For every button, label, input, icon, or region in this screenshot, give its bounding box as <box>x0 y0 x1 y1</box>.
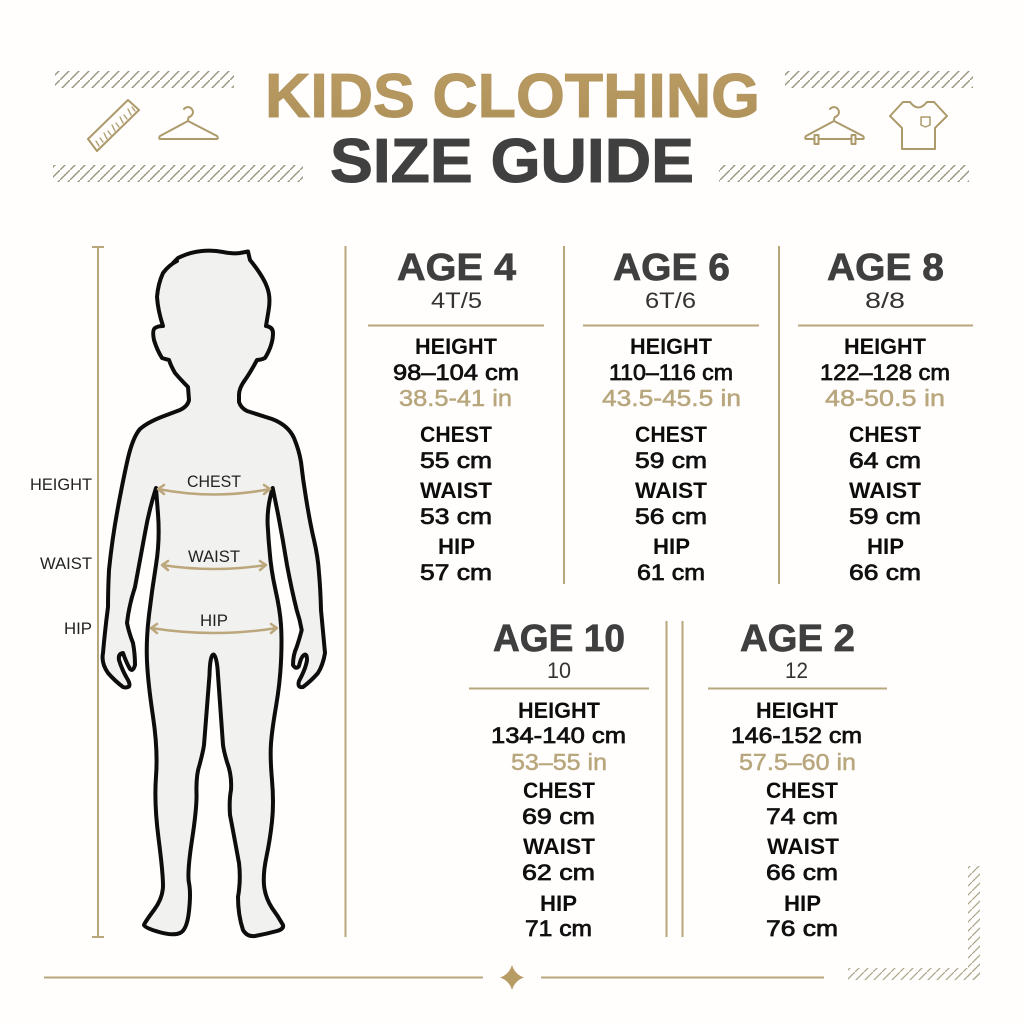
panel: age 2: 66 cm <box>766 860 838 885</box>
hip label: HIP <box>64 619 92 638</box>
panel: age 6: WAIST <box>635 478 707 503</box>
panel: age 4: WAIST <box>420 478 492 503</box>
panel: age 10: 62 cm <box>522 860 595 885</box>
panel: age 4: HIP <box>438 534 475 559</box>
panel: age 4: 53 cm <box>420 504 492 529</box>
waist label: WAIST <box>40 554 92 573</box>
panel: age 2: 57.5–60 in <box>739 749 856 775</box>
panel: age 10: 69 cm <box>522 804 595 829</box>
header hatch bands <box>53 71 973 182</box>
panel: age 6: CHEST <box>635 422 707 447</box>
icon: hanger <box>159 107 218 139</box>
panel: age 8: 59 cm <box>849 504 921 529</box>
panel: age 8: AGE 8 <box>827 247 944 289</box>
panel: age 2: 12 <box>785 658 808 683</box>
panel: age 6: 6T/6 <box>645 288 696 313</box>
panel: age 8: 122–128 cm <box>820 360 950 385</box>
panel: age 2: 74 cm <box>766 804 838 829</box>
hip measurement <box>151 611 277 633</box>
panel: age 2: AGE 2 <box>740 618 855 660</box>
panel: age 6: 61 cm <box>637 560 705 585</box>
panel: age 6: AGE 6 <box>613 247 730 289</box>
panel: age 10: 10 <box>547 658 571 683</box>
icon: footer star <box>500 965 524 990</box>
panel: age 6: HIP <box>653 534 690 559</box>
icon: t-shirt <box>890 102 947 149</box>
panel: age 8 <box>798 247 973 585</box>
panel: age 8: 8/8 <box>865 288 905 313</box>
icon: ruler <box>88 100 139 151</box>
height measuring bar <box>92 247 104 937</box>
panel: age 10: WAIST <box>523 834 595 859</box>
panel: age 10: HIP <box>540 891 577 916</box>
panel: age 2: WAIST <box>767 834 839 859</box>
panel: age 8: HEIGHT <box>844 334 926 359</box>
panel: age 6: 59 cm <box>635 448 707 473</box>
title: SIZE GUIDE <box>330 127 694 196</box>
panel: age 2: CHEST <box>766 778 838 803</box>
footer rule <box>44 976 824 978</box>
panel: age 4: HEIGHT <box>415 334 497 359</box>
title: KIDS CLOTHING <box>265 62 760 131</box>
panel: age 6: 110–116 cm <box>609 360 733 385</box>
panel: age 2: 146-152 cm <box>731 723 862 748</box>
icon: hanger with clips <box>805 107 864 144</box>
waist measurement: WAIST <box>188 547 240 566</box>
panel: age 4: 57 cm <box>420 560 492 585</box>
panel: age 4: 4T/5 <box>431 288 482 313</box>
chest measurement: CHEST <box>187 472 241 491</box>
panel: age 4: CHEST <box>420 422 492 447</box>
title <box>265 62 760 196</box>
panel: age 4: 55 cm <box>420 448 492 473</box>
panel: age 6: 56 cm <box>635 504 707 529</box>
corner hatch <box>848 866 980 980</box>
panel: age 10: HEIGHT <box>518 698 600 723</box>
panel: age 6 <box>583 247 759 585</box>
panel: age 2: HEIGHT <box>756 698 838 723</box>
panel: age 2 <box>708 618 887 941</box>
panel: age 8: 64 cm <box>849 448 921 473</box>
panel: age 4: AGE 4 <box>397 247 516 289</box>
panel: age 10: 134-140 cm <box>491 723 626 748</box>
column dividers <box>346 246 779 937</box>
height label: HEIGHT <box>30 475 92 494</box>
panel: age 4 <box>368 247 544 585</box>
chest measurement <box>158 472 270 494</box>
waist measurement <box>162 547 266 570</box>
panel: age 8: 66 cm <box>849 560 921 585</box>
panel: age 8: HIP <box>867 534 904 559</box>
panel: age 10: 71 cm <box>525 916 592 941</box>
panel: age 10: CHEST <box>523 778 595 803</box>
child body silhouette <box>103 251 325 936</box>
panel: age 6: HEIGHT <box>630 334 712 359</box>
panel: age 4: 38.5-41 in <box>399 385 512 411</box>
panel: age 2: 76 cm <box>766 916 838 941</box>
panel: age 8: WAIST <box>849 478 921 503</box>
panel: age 10 <box>469 618 649 941</box>
panel: age 8: CHEST <box>849 422 921 447</box>
panel: age 10: 53–55 in <box>511 749 607 775</box>
panel: age 4: 98–104 cm <box>393 360 519 385</box>
panel: age 6: 43.5-45.5 in <box>602 385 741 411</box>
panel: age 8: 48-50.5 in <box>825 385 945 411</box>
panel: age 10: AGE 10 <box>493 618 625 660</box>
hip measurement: HIP <box>200 611 228 630</box>
panel: age 2: HIP <box>784 891 821 916</box>
